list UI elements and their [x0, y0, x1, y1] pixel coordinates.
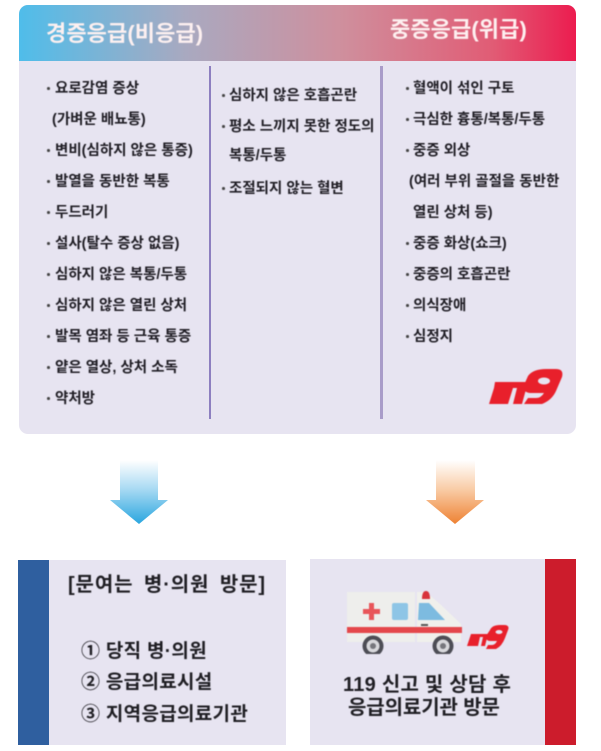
- list: severe symptoms: 심정지: [413, 329, 453, 345]
- list: severe symptoms: [405, 79, 560, 345]
- arrow: blue down: [110, 463, 168, 524]
- list: middle symptoms: [221, 86, 374, 197]
- panel: call 119: [310, 559, 576, 745]
- list: middle symptoms: 평소 느끼지 못한 정도의: [229, 119, 374, 135]
- list: severe symptoms: 중증의 호흡곤란: [413, 267, 510, 283]
- caption line 2: 응급의료기관 방문: [348, 697, 500, 719]
- divider: left: [209, 66, 211, 419]
- list: severe symptoms: 혈액이 섞인 구토: [413, 81, 514, 97]
- list: severe symptoms: 열린 상처 등): [413, 205, 493, 221]
- list: middle symptoms: 심하지 않은 호흡곤란: [229, 88, 357, 104]
- icon: 119 logo: [488, 368, 564, 405]
- option 2: ② 응급의료시설: [81, 672, 213, 693]
- arrow: orange down: [426, 463, 484, 524]
- list: mild symptoms: 심하지 않은 복통/두통: [55, 267, 187, 283]
- heading: severe emergency: 중증응급(위급): [390, 17, 527, 42]
- list: mild symptoms: 약처방: [55, 391, 95, 407]
- list: severe symptoms: 극심한 흉통/복통/두통: [413, 112, 545, 128]
- caption: 119 신고 및 상담 후: [343, 674, 511, 696]
- header gradient band: [19, 5, 576, 61]
- panel: symptoms: [19, 5, 576, 434]
- list: mild symptoms: (가벼운 배뇨통): [52, 112, 146, 128]
- blue side bar: [18, 560, 49, 745]
- heading: mild emergency: 경증응급(비응급): [46, 21, 203, 46]
- list: severe symptoms: (여러 부위 골절을 동반한: [409, 174, 559, 190]
- list: severe symptoms: 의식장애: [413, 298, 466, 314]
- list: mild symptoms: 요로감염 증상: [55, 81, 139, 97]
- icon: ambulance: [346, 590, 510, 655]
- list: middle symptoms: 조절되지 않는 혈변: [229, 181, 344, 197]
- list: mild symptoms: 심하지 않은 열린 상처: [55, 298, 187, 314]
- list: mild symptoms: 발열을 동반한 복통: [55, 174, 170, 190]
- list: middle symptoms: 복통/두통: [229, 148, 286, 164]
- list: mild symptoms: 두드러기: [55, 205, 108, 221]
- list: mild symptoms: [46, 80, 193, 407]
- list: severe symptoms: 중증 외상: [413, 143, 470, 159]
- list: mild symptoms: 얕은 열상, 상처 소독: [55, 360, 178, 376]
- divider: right: [380, 66, 383, 419]
- list: mild symptoms: 설사(탈수 증상 없음): [55, 236, 179, 252]
- option 1: ① 당직 병·의원: [81, 641, 207, 662]
- panel heading: [문여는 병·의원 방문]: [68, 574, 266, 596]
- option 3: ③ 지역응급의료기관: [81, 704, 248, 725]
- list: severe symptoms: 중증 화상(쇼크): [413, 236, 507, 252]
- list: mild symptoms: 변비(심하지 않은 통증): [55, 143, 193, 159]
- list: mild symptoms: 발목 염좌 등 근육 통증: [55, 329, 191, 345]
- red side bar: [545, 559, 576, 745]
- panel: visit clinic: [18, 560, 286, 745]
